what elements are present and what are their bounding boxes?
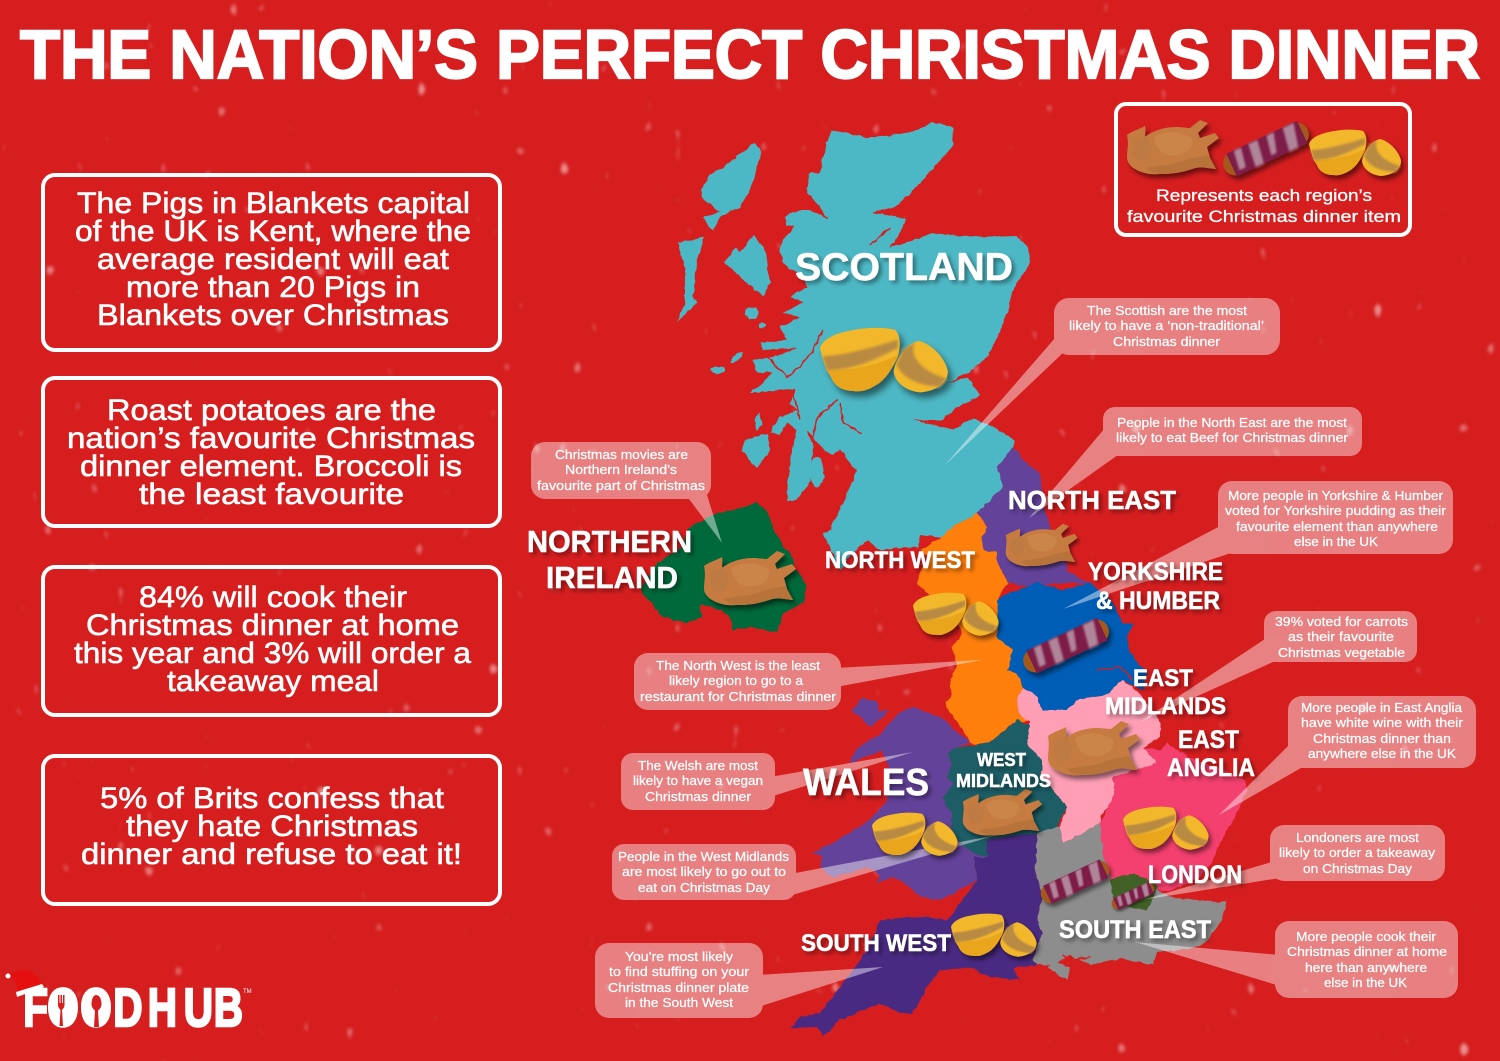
panel: cook at home fact: this year and 3% will order a	[74, 637, 471, 670]
icon: legend turkey	[1127, 120, 1219, 174]
icon: London pigs in blankets	[1110, 881, 1156, 911]
callout: Wales: likely to have a vegan	[633, 773, 763, 788]
region labels: EAST	[1178, 726, 1239, 754]
callout: Scotland	[945, 298, 1280, 465]
sea lochs and estuaries	[767, 205, 1133, 960]
legend	[1116, 104, 1410, 235]
icon: East Anglia roast potatoes	[1123, 807, 1209, 850]
region labels: YORKSHIRE	[1088, 558, 1223, 586]
region labels	[527, 246, 1255, 957]
callout: South East	[1135, 921, 1458, 998]
panel: roast potatoes fact: dinner element. Broccoli is	[80, 450, 462, 483]
icon: South East pigs in blankets	[1037, 857, 1113, 907]
callout: North West: likely region to go to a	[669, 673, 804, 688]
callout: Scotland: likely to have a ‘non-traditional’	[1069, 318, 1264, 333]
region: South East	[1033, 823, 1227, 980]
callout: North West: restaurant for Christmas dinner	[640, 689, 837, 704]
callout: South East: else in the UK	[1324, 975, 1407, 990]
region labels: EAST	[1133, 665, 1193, 692]
callout: West Midlands: are most likely to go out to	[622, 864, 786, 879]
legend: favourite Christmas dinner item	[1127, 207, 1401, 226]
legend: Represents each region’s	[1156, 186, 1372, 205]
region labels: NORTH EAST	[1008, 485, 1176, 515]
callout: South East: here than anywhere	[1305, 960, 1427, 975]
callout: South West: Christmas dinner plate	[608, 980, 749, 995]
panel: pigs in blankets fact: more than 20 Pigs in	[126, 271, 420, 304]
callout: East Anglia: have white wine with their	[1301, 715, 1464, 730]
callout: East Midlands: as their favourite	[1288, 629, 1394, 644]
region: Wales	[813, 698, 987, 900]
panel: cook at home fact: Christmas dinner at home	[86, 609, 459, 642]
icon: West Midlands turkey	[963, 789, 1042, 836]
panel: cook at home fact: 84% will cook their	[139, 581, 407, 614]
logo: Foodhub: TM	[243, 989, 252, 995]
callout: Yorkshire and Humber	[1063, 481, 1453, 609]
icon: Yorkshire pigs in blankets	[1019, 615, 1113, 677]
icon: North East turkey	[1006, 524, 1078, 566]
callout: Scotland: Christmas dinner	[1113, 334, 1221, 349]
region labels: MIDLANDS	[956, 771, 1051, 791]
region labels: SOUTH EAST	[1059, 916, 1211, 944]
callout: East Midlands	[1140, 611, 1417, 722]
region: East Midlands	[1017, 680, 1160, 843]
callout: London: on Christmas Day	[1303, 861, 1413, 876]
region: South West	[790, 833, 1043, 1037]
region labels: WALES	[803, 762, 929, 804]
callout: South East: More people cook their	[1296, 929, 1437, 944]
callout: North West: The North West is the least	[656, 658, 820, 673]
region labels: LONDON	[1148, 861, 1242, 889]
panel: hate christmas dinner fact: they hate Christmas	[126, 810, 418, 843]
callout: East Midlands: 39% voted for carrots	[1275, 614, 1409, 629]
callout: North East: People in the North East are the most	[1117, 415, 1347, 430]
callout: East Midlands: Christmas vegetable	[1278, 645, 1405, 660]
panel: hate christmas dinner fact: dinner and refuse to eat it!	[81, 838, 462, 871]
callout: Wales	[621, 752, 913, 810]
callout: Yorkshire and Humber: else in the UK	[1294, 534, 1378, 549]
callout: South West: You’re most likely	[625, 949, 734, 964]
icon: legend roast potatoes	[1309, 130, 1401, 176]
panel: roast potatoes fact: the least favourite	[139, 478, 404, 511]
region: Yorkshire and Humber	[997, 582, 1147, 710]
region: Northern Ireland	[640, 502, 807, 633]
logo: Foodhub: FOODHUB	[23, 978, 243, 1038]
icon: legend pigs in blankets	[1219, 118, 1313, 180]
callout: Yorkshire and Humber: voted for Yorkshire pudding as their	[1225, 503, 1447, 518]
callout: East Anglia: anywhere else in the UK	[1308, 746, 1456, 761]
callout: Yorkshire and Humber: More people in Yorkshire & Humber	[1228, 488, 1444, 503]
panel: pigs in blankets fact	[43, 175, 500, 350]
region: West Midlands	[943, 720, 1067, 857]
region: North East	[977, 447, 1090, 587]
icon: Northern Ireland turkey	[704, 551, 796, 605]
callout: West Midlands: eat on Christmas Day	[638, 880, 771, 895]
region labels: SCOTLAND	[795, 246, 1013, 289]
region labels: SOUTH WEST	[801, 930, 951, 957]
callout: North East	[1029, 407, 1362, 518]
region labels: IRELAND	[546, 560, 678, 595]
icon: East Midlands turkey	[1048, 721, 1140, 775]
icon: South West roast potatoes	[951, 914, 1037, 957]
callout: Wales: Christmas dinner	[645, 789, 752, 804]
callout: London: likely to order a takeaway	[1279, 845, 1436, 860]
callout: North West	[634, 653, 982, 710]
map of the UK	[640, 123, 1247, 1037]
callout: North East: likely to eat Beef for Christmas dinner	[1116, 430, 1349, 445]
panel: roast potatoes fact	[43, 378, 500, 526]
callout: South West: to find stuffing on your	[609, 964, 750, 979]
callout: West Midlands	[612, 835, 997, 900]
callout: East Anglia: Christmas dinner than	[1313, 731, 1451, 746]
callout: Northern Ireland: Northern Ireland’s	[565, 462, 678, 477]
callout: Yorkshire and Humber: favourite element than anywhere	[1236, 519, 1438, 534]
callout: Scotland: The Scottish are the most	[1087, 303, 1247, 318]
callout: South East: Christmas dinner at home	[1287, 944, 1447, 959]
panel: pigs in blankets fact: of the UK is Kent, where the	[75, 215, 471, 248]
region labels: NORTH WEST	[825, 547, 975, 574]
callout: Northern Ireland: Christmas movies are	[555, 447, 688, 462]
panel: roast potatoes fact: nation’s favourite Christmas	[67, 422, 475, 455]
region: North West	[917, 513, 1030, 745]
callout: Wales: The Welsh are most	[638, 758, 758, 773]
callout: South West	[595, 943, 883, 1018]
callout: South West: in the South West	[625, 995, 733, 1010]
callout: London	[1142, 825, 1445, 900]
region labels: MIDLANDS	[1105, 693, 1226, 720]
region: East Anglia	[1098, 743, 1247, 890]
callout: West Midlands: People in the West Midlands	[618, 849, 790, 864]
region: Scotland	[677, 123, 1030, 570]
icon: North West roast potatoes	[913, 593, 999, 636]
panel: roast potatoes fact: Roast potatoes are the	[107, 394, 436, 427]
callout: London: Londoners are most	[1296, 830, 1419, 845]
callout: East Anglia: More people in East Anglia	[1301, 700, 1463, 715]
region labels: ANGLIA	[1167, 754, 1255, 782]
callout: East Anglia	[1219, 696, 1476, 815]
region labels: & HUMBER	[1096, 587, 1220, 615]
region labels: NORTHERN	[527, 524, 692, 559]
panel: pigs in blankets fact: The Pigs in Blankets capital	[77, 187, 470, 220]
callout: Northern Ireland	[531, 442, 722, 543]
panel: hate christmas dinner fact	[43, 756, 500, 904]
panel: pigs in blankets fact: average resident will eat	[97, 243, 450, 276]
callout: Northern Ireland: favourite part of Christmas	[537, 478, 706, 493]
panel: cook at home fact: takeaway meal	[167, 665, 379, 698]
panel: pigs in blankets fact: Blankets over Christmas	[97, 299, 449, 332]
panel: hate christmas dinner fact: 5% of Brits confess that	[100, 782, 445, 815]
icon: Scotland roast potatoes	[820, 328, 948, 392]
region: London	[1110, 873, 1158, 910]
icon: Wales roast potatoes	[872, 813, 958, 856]
panel: cook at home fact	[43, 567, 500, 715]
region labels: WEST	[977, 750, 1026, 770]
